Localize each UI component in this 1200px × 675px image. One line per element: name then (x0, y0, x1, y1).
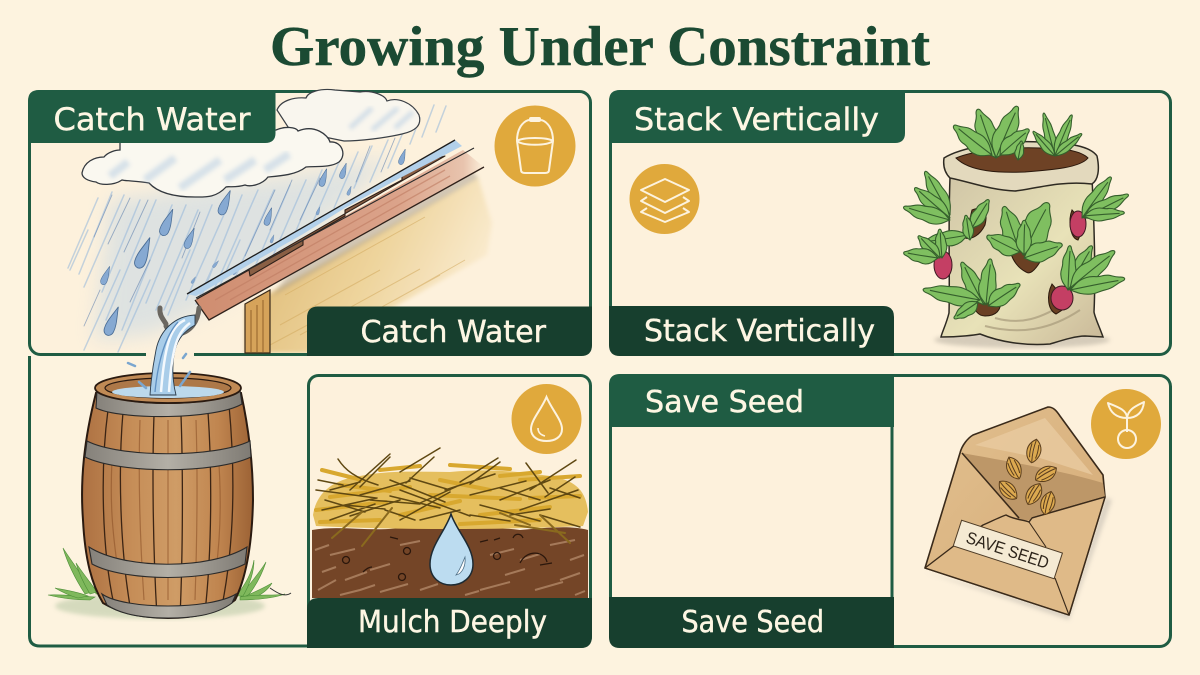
envelope shadow (925, 497, 1112, 620)
footer text: Catch Water (360, 315, 547, 350)
post (245, 290, 270, 353)
top hoop (96, 390, 242, 417)
header text: Catch Water (54, 102, 251, 138)
footer: stack vertically (609, 306, 894, 356)
barrel rim (95, 373, 241, 403)
leaves (901, 102, 1132, 324)
middle hoop (85, 441, 251, 470)
illustration: straw (313, 470, 588, 529)
title: Growing Under Constraint (270, 16, 930, 78)
siding wall (245, 177, 492, 353)
footer text: Save Seed (682, 605, 824, 640)
cloud back (277, 89, 420, 141)
rain haze (95, 155, 395, 340)
panel: save seed (609, 374, 1170, 648)
icon: bucket (494, 106, 576, 186)
grass shadow (55, 593, 265, 619)
water in barrel (112, 386, 224, 398)
header: stack vertically (609, 90, 905, 143)
water splashes (128, 280, 190, 388)
shingles (197, 156, 445, 299)
inner panel: mulch (307, 376, 592, 648)
sack body (941, 178, 1103, 345)
icon: water drop (512, 384, 582, 454)
radishes (934, 211, 1086, 310)
envelope back (925, 407, 1105, 615)
raindrops (99, 148, 408, 337)
seeds (995, 438, 1060, 516)
footer text: Mulch Deeply (358, 605, 547, 640)
sack rim (944, 142, 1098, 191)
header: catch water (28, 90, 276, 143)
soil (956, 148, 1088, 172)
footer: save seed (609, 597, 894, 648)
illustration: grow sack (901, 102, 1132, 348)
bottom flaps (925, 497, 1105, 615)
illustration: soil (312, 527, 588, 598)
icon: stacked layers (630, 164, 700, 234)
roof water and top line (187, 140, 462, 296)
interior pocket (962, 453, 1105, 520)
bottom hoop (102, 594, 236, 618)
flap interior (975, 418, 1093, 475)
footer: catch water (307, 306, 592, 356)
planting holes (965, 208, 1085, 316)
soil pebbles (342, 534, 552, 580)
footer: mulch deeply (307, 598, 592, 648)
icon: seedling (1091, 389, 1161, 459)
illustration: downspout water (128, 280, 195, 395)
barrel body (82, 393, 253, 618)
footer text: Stack Vertically (644, 314, 875, 349)
illustration: water drop (430, 514, 473, 585)
panel: mulch deeply (with rain barrel column) (30, 280, 592, 648)
illustration: seed envelope (925, 407, 1112, 620)
illustration: rain, roof and gutter (68, 89, 492, 353)
panel: catch water (28, 89, 592, 356)
lower hoop (89, 547, 247, 578)
cloud front (82, 127, 343, 197)
ground shadow (934, 332, 1110, 348)
header: save seed (609, 374, 894, 427)
divider (890, 420, 894, 605)
staves (103, 405, 233, 617)
grass (48, 548, 285, 600)
rain streaks (68, 105, 446, 352)
fascia board (195, 150, 484, 320)
illustration: rain barrel (48, 373, 291, 619)
header text: Stack Vertically (634, 102, 879, 138)
gutter (160, 308, 199, 334)
seed label: SAVE SEED (964, 528, 1051, 573)
panel: stack vertically (609, 90, 1170, 356)
header text: Save Seed (645, 385, 804, 420)
